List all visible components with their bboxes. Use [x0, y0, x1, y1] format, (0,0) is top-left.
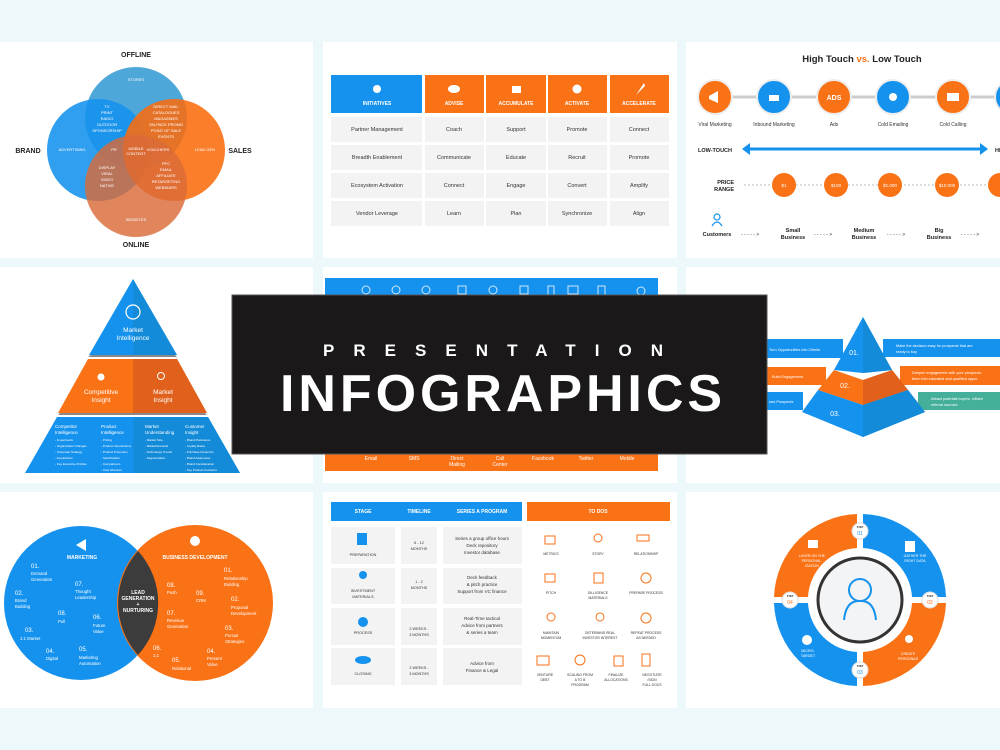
panel: marketing vs business development venn: Revenue: [167, 618, 185, 623]
panel: persona cycle: [686, 492, 1000, 708]
panel: channels table: SMS: [409, 456, 420, 462]
panel: market intelligence pyramid: - Brand Preference: [185, 438, 211, 442]
panel: high touch vs low touch: Big: [935, 228, 943, 234]
panel: venn marketing channels: RADIO: [101, 116, 113, 121]
panel: market intelligence pyramid: - Acquisitions: [55, 456, 73, 460]
panel: high touch vs low touch: Cold Calling: [940, 122, 967, 128]
panel: market intelligence pyramid: [0, 267, 313, 483]
panel: series A program table: 2 WEEKS -: [409, 627, 429, 631]
panel: high touch vs low touch: LOW-TOUCH: [698, 148, 732, 154]
panel: initiatives table: [323, 42, 677, 258]
panel: marketing vs business development venn: LEAD: [131, 590, 145, 596]
panel: marketing vs business development venn: Digital: [46, 656, 58, 661]
panel: channels table: Call: [496, 456, 504, 462]
panel: market intelligence pyramid: Product: [101, 424, 117, 429]
panel: marketing vs business development venn: Building: [15, 604, 31, 609]
panel: series A program table: Series a group office hours: [455, 536, 510, 541]
panel: marketing vs business development venn: Generation: [31, 577, 53, 582]
panel: initiatives table: ADVISE: [445, 101, 464, 107]
panel: marketing vs business development venn: 07.: [75, 582, 84, 588]
panel: sales pyramid: them into educated and qualified oppor: [912, 377, 978, 381]
panel: persona cycle: STEP: [857, 665, 864, 668]
panel: marketing vs business development venn: 04.: [46, 649, 55, 655]
panel: high touch vs low touch: - - - - - >: [961, 232, 979, 238]
panel: venn marketing channels: WEBINARS: [155, 185, 177, 190]
panel: market intelligence pyramid: Market: [145, 424, 160, 429]
panel: series A program table: STORY: [592, 552, 605, 556]
panel: series A program table: MATERIALS: [352, 595, 374, 599]
panel: series A program table: MATERIALS: [589, 596, 608, 600]
panel: initiatives table: Connect: [444, 183, 465, 189]
panel: market intelligence pyramid: Intelligence: [117, 335, 150, 342]
panel: series A program table: DETERMIND REAL: [585, 631, 615, 635]
panel: series A program table: AS NEEDED: [636, 636, 656, 640]
panel: marketing vs business development venn: NURTURING: [123, 608, 153, 614]
panel: marketing vs business development venn: GENERATION: [122, 596, 155, 602]
panel: series A program table: FULL DOCS: [643, 683, 662, 687]
panel: initiatives table: Promote: [629, 155, 649, 161]
panel: venn marketing channels: VIRAL: [101, 171, 114, 176]
panel: venn marketing channels: OFFLINE: [121, 52, 151, 59]
panel: market intelligence pyramid: Insight: [185, 430, 199, 435]
panel: high touch vs low touch: ADS: [827, 95, 842, 102]
panel: series A program table: STAGE: [355, 509, 372, 515]
panel: series A program table: TIMELINE: [407, 509, 431, 515]
panel: series A program table: 1 - 2: [415, 580, 423, 584]
panel: persona cycle: STEP: [927, 595, 934, 598]
panel: initiatives table: Breadth Enablement: [352, 155, 403, 161]
panel: market intelligence pyramid: - Organization Changes: [55, 444, 87, 448]
panel: series A program table: SERIES A PROGRAM: [457, 509, 507, 515]
panel: market intelligence pyramid: - Product Promotion: [101, 450, 128, 454]
panel: series A program table: RELATIONSHIP: [634, 552, 659, 556]
panel: venn marketing channels: SALES: [228, 148, 252, 155]
panel: initiatives table: Support: [506, 127, 526, 133]
panel: high touch vs low touch: $1,000: [883, 183, 897, 188]
panel: marketing vs business development venn: 08.: [167, 583, 176, 589]
panel: initiatives table: Convert: [567, 183, 587, 189]
panel: initiatives table: Vendor Leverage: [356, 211, 398, 217]
panel: venn marketing channels: PR: [111, 147, 117, 152]
panel: market intelligence pyramid: - Cost Structure: [101, 468, 122, 472]
panel: venn marketing channels: CATALOGUES: [153, 110, 180, 115]
panel: marketing vs business development venn: Value: [207, 662, 218, 667]
panel: venn marketing channels: MAGAZINES: [154, 116, 178, 121]
panel: venn marketing channels: DIRECT MAIL: [153, 104, 179, 109]
panel: marketing vs business development venn: Pull: [58, 619, 65, 624]
panel: marketing vs business development venn: 01.: [31, 564, 40, 570]
panel: high touch vs low touch: Cold Emailing: [878, 122, 909, 128]
panel: market intelligence pyramid: Understanding: [145, 430, 175, 435]
panel: series A program table: NEGOTIATE: [642, 673, 662, 677]
panel: venn marketing channels: EMAIL: [160, 167, 173, 172]
panel: sales pyramid: 02.: [840, 383, 850, 390]
panel: market intelligence pyramid: Market: [123, 327, 143, 334]
panel: series A program table: PREPARATION: [350, 553, 377, 557]
panel: series A program table: MONTHS: [411, 547, 428, 551]
panel: marketing vs business development venn: Building: [224, 582, 240, 587]
panel: market intelligence pyramid: - Brand Awareness: [185, 456, 211, 460]
panel: marketing vs business development venn: CRM: [196, 598, 206, 603]
panel: series A program table: & pitch practice: [467, 582, 498, 587]
panel: series A program table: 6 - 12: [414, 541, 424, 545]
panel: marketing vs business development venn: 1:1 Market: [20, 636, 41, 641]
panel: series A program table: METRICS: [543, 552, 559, 556]
panel: market intelligence pyramid: - Key Executive Profiles: [55, 462, 87, 466]
panel: series A program table: 3 MONTHS: [409, 633, 429, 637]
panel: high touch vs low touch: Business: [927, 235, 951, 241]
panel: venn marketing channels: ON-PACK PROMO: [149, 122, 183, 127]
panel: marketing vs business development venn: 02.: [231, 597, 240, 603]
panel: sales pyramid: Turn Opportunities into Clients: [769, 348, 820, 352]
panel: market intelligence pyramid: - Comparisons: [101, 462, 121, 466]
panel: series A program table: PREPARE PROCESS: [629, 591, 663, 595]
panel: venn marketing channels: STORES: [128, 77, 145, 82]
panel: marketing vs business development venn: 05.: [172, 658, 181, 664]
panel: series A program table: PROCESS: [354, 631, 373, 635]
panel: series A program table: DILLIGENCE: [588, 591, 609, 595]
panel: marketing vs business development venn: 08.: [58, 611, 67, 617]
panel: series A program table: DEBT: [540, 678, 550, 682]
panel: initiatives table: Align: [633, 211, 645, 217]
panel: series A program table: SCALING FROM: [567, 673, 593, 677]
panel: marketing vs business development venn: Generation: [167, 624, 189, 629]
panel: series A program table: Deck repository: [466, 543, 498, 548]
panel: high touch vs low touch: Business: [781, 235, 805, 241]
panel: market intelligence pyramid: - Technology Trends: [145, 450, 172, 454]
panel: persona cycle: CREATE: [901, 652, 916, 656]
panel: venn marketing channels: DISPLAY: [99, 165, 116, 170]
panel: marketing vs business development venn: Future: [93, 623, 106, 628]
panel: marketing vs business development venn: 07.: [167, 611, 176, 617]
panel: marketing vs business development venn: Marketing: [79, 655, 98, 660]
panel: venn marketing channels: NATIVE: [100, 183, 114, 188]
panel: initiatives table: Connect: [629, 127, 650, 133]
panel: marketing vs business development venn: Strategies: [225, 639, 244, 644]
panel: venn marketing channels: PRINT: [101, 110, 114, 115]
panel: market intelligence pyramid: - Corporate Strategy: [55, 450, 83, 454]
panel: series A program table: MOMENTUM: [541, 636, 561, 640]
panel: marketing vs business development venn: Proposal: [231, 605, 248, 610]
panel: high touch vs low touch: $10,000: [939, 183, 956, 188]
panel: market intelligence pyramid: - Segmentation: [145, 456, 166, 460]
panel: series A program table: MONTHS: [411, 586, 428, 590]
panel: marketing vs business development venn: Brand: [15, 598, 27, 603]
panel: persona cycle: STEP: [787, 595, 794, 598]
panel: marketing vs business development venn: Push: [167, 590, 177, 595]
panel: venn marketing channels: AFFILIATE: [156, 173, 176, 178]
panel: channels table: Mailing: [449, 462, 465, 468]
panel: sales pyramid: ready to buy: [896, 350, 917, 354]
panel: venn marketing channels: ADVERTISING: [58, 147, 86, 152]
panel: marketing vs business development venn: 03.: [225, 626, 234, 632]
panel: marketing vs business development venn: [0, 492, 313, 708]
panel: high touch vs low touch: Small: [786, 228, 801, 234]
panel: sales pyramid: Make the decision easy for prospects that are: [896, 344, 973, 348]
panel: series A program table: Support from VC finance: [457, 589, 507, 594]
panel: market intelligence pyramid: - Brand Consideration: [185, 462, 215, 466]
panel: marketing vs business development venn: MARKETING: [67, 555, 97, 561]
title: presentation: PRESENTATION: [323, 341, 663, 360]
panel: series A program table: Deck feedback: [467, 575, 498, 580]
panel: venn marketing channels: PPC: [162, 161, 170, 166]
panel: marketing vs business development venn: 01.: [224, 568, 233, 574]
panel: venn marketing channels: MOBILE: [128, 146, 144, 151]
panel: persona cycle: RIGHT DATA: [904, 559, 926, 563]
panel: sales pyramid: 01.: [849, 350, 859, 357]
panel: venn marketing channels: [0, 42, 313, 258]
panel: series A program table: REPEAT PROCESS: [631, 631, 662, 635]
panel: series A program table: Investor database: [464, 550, 500, 555]
panel: venn marketing channels: EVENTS: [158, 134, 174, 139]
panel: channels table: [323, 267, 677, 483]
panel: initiatives table: Educate: [506, 155, 526, 161]
panel: persona cycle: TARGET: [801, 654, 816, 658]
panel: market intelligence pyramid: - Specification: [101, 456, 120, 460]
panel: series A program table: [323, 492, 677, 708]
panel: market intelligence pyramid: - Marketforecasts: [145, 444, 169, 448]
panel: sales pyramid: Build Engagement: [772, 375, 804, 379]
panel: marketing vs business development venn: Demand: [31, 571, 48, 576]
panel: sales pyramid: referral sources: [931, 403, 957, 407]
panel: series A program table: INVESTMENT: [351, 589, 376, 593]
panel: sales pyramid: ract Prospects: [769, 400, 793, 404]
panel: marketing vs business development venn: 04.: [207, 649, 216, 655]
panel: marketing vs business development venn: 06.: [153, 646, 162, 652]
panel: market intelligence pyramid: - Pricing: [101, 438, 112, 442]
panel: marketing vs business development venn: Automation: [79, 661, 101, 666]
panel: high touch vs low touch: $1: [781, 183, 787, 188]
panel: persona cycle: STEP: [857, 526, 864, 529]
panel: marketing vs business development venn: Relational: [172, 666, 191, 671]
panel: marketing vs business development venn: 09.: [196, 591, 205, 597]
title: infographics: INFOGRAPHICS: [280, 365, 722, 423]
panel: market intelligence pyramid: Competitor: [55, 424, 78, 429]
panel: venn marketing channels: CONTENT: [126, 151, 146, 156]
panel: initiatives table: INITIATIVES: [363, 101, 392, 107]
panel: initiatives table: Recruit: [568, 155, 586, 161]
panel: series A program table: INVESTOR INTEREST: [583, 636, 617, 640]
panel: series A program table: Advice from: [470, 661, 494, 666]
panel: venn marketing channels: OUTDOOR: [97, 122, 117, 127]
panel: persona cycle: 04: [787, 600, 793, 606]
panel: marketing vs business development venn: 1:1: [153, 653, 160, 658]
panel: persona cycle: 03: [857, 670, 863, 676]
panel: persona cycle: LAYER ON THE: [799, 554, 826, 558]
panel: market intelligence pyramid: - Key Product Concerns: [185, 468, 217, 472]
panel: marketing vs business development venn: BUSINESS DEVELOPMENT: [162, 555, 228, 561]
panel: marketing vs business development venn: 06.: [93, 615, 102, 621]
panel: sales pyramid: Deepen engagement with your prospects: [912, 371, 981, 375]
panel: marketing vs business development venn: 03.: [25, 628, 34, 634]
panel: series A program table: Advice from partners: [461, 623, 504, 628]
panel: channels table: Email: [365, 456, 377, 462]
panel: venn marketing channels: BRAND: [15, 148, 41, 155]
panel: market intelligence pyramid: Market: [153, 389, 173, 396]
panel: market intelligence pyramid: Intelligence: [55, 430, 78, 435]
panel: market intelligence pyramid: Customer: [185, 424, 205, 429]
panel: initiatives table: ACTIVATE: [565, 101, 590, 107]
panel: channels table: Mobile: [620, 456, 635, 462]
panel: market intelligence pyramid: Intelligence: [101, 430, 124, 435]
panel: venn marketing channels: LEAD GEN: [195, 147, 215, 152]
panel: venn marketing channels: SPONSORSHIP: [92, 128, 122, 133]
panel: high touch vs low touch: Business: [852, 235, 876, 241]
panel: series A program table: FINALIZE: [609, 673, 624, 677]
panel: initiatives table: Plan: [510, 211, 522, 217]
panel: market intelligence pyramid: - Product Introductions: [101, 444, 132, 448]
panel: series A program table: MAINTAIN: [543, 631, 560, 635]
panel: high touch vs low touch: Ads: [830, 122, 839, 128]
panel: persona cycle: 02: [927, 600, 933, 606]
panel: high touch vs low touch: Medium: [854, 228, 874, 234]
panel: marketing vs business development venn: Value: [93, 629, 104, 634]
panel: market intelligence pyramid: - Investments: [55, 438, 74, 442]
panel: initiatives table: Communicate: [437, 155, 471, 161]
panel: sales pyramid: [686, 267, 1000, 483]
panel: initiatives table: Engage: [507, 183, 525, 189]
panel: series A program table: Real-Time tactical: [464, 616, 500, 621]
panel: market intelligence pyramid: - Market Size: [145, 438, 163, 442]
panel: initiatives table: Amplify: [630, 183, 648, 189]
panel: high touch vs low touch: RANGE: [714, 187, 734, 193]
panel: channels table: Center: [492, 462, 508, 468]
panel: persona cycle: GATHER THE: [904, 554, 927, 558]
title banner: [232, 295, 767, 454]
panel: marketing vs business development venn: 02.: [15, 591, 24, 597]
panel: persona cycle: IZATION: [805, 564, 819, 568]
panel: initiatives table: Synchronize: [562, 211, 592, 217]
panel: high touch vs low touch: Customers: [703, 232, 731, 238]
panel: series A program table: ALLOCATIONS: [604, 678, 628, 682]
panel: initiatives table: Ecosystem Activation: [351, 183, 403, 189]
panel: series A program table: A TO B: [575, 678, 586, 682]
panel: series A program table: & series a team: [466, 630, 498, 635]
panel: high touch vs low touch: - - - - - >: [887, 232, 905, 238]
panel: marketing vs business development venn: Pursuit: [225, 633, 239, 638]
panel: series A program table: /SIGN: [647, 678, 657, 682]
panel: channels table: Direct: [450, 456, 464, 462]
panel: marketing vs business development venn: Thought: [75, 589, 92, 594]
panel: marketing vs business development venn: +: [137, 602, 140, 608]
panel: sales pyramid: 03.: [830, 411, 840, 418]
panel: marketing vs business development venn: Present: [207, 656, 223, 661]
panel: marketing vs business development venn: 05.: [79, 647, 88, 653]
panel: series A program table: VENTURE: [537, 673, 554, 677]
panel: series A program table: Finance & Legal: [466, 668, 498, 673]
panel: venn marketing channels: POINT OF SALE: [151, 128, 181, 133]
panel: persona cycle: 01: [857, 531, 863, 537]
panel: high touch vs low touch: PRICE: [717, 180, 734, 186]
panel: market intelligence pyramid: Insight: [153, 397, 173, 404]
panel: venn marketing channels: TV: [104, 104, 110, 109]
panel: venn marketing channels: VOUCHERS: [147, 147, 170, 152]
panel: market intelligence pyramid: Competitive: [84, 389, 119, 396]
panel: high touch vs low touch: $100: [831, 183, 842, 188]
panel: series A program table: TO DOS: [588, 509, 608, 515]
panel: initiatives table: Partner Management: [351, 127, 403, 133]
panel: initiatives table: Coach: [446, 127, 462, 133]
panel: sales pyramid: Attract potential buyers, influen: [931, 397, 983, 401]
panel: initiatives table: Promote: [567, 127, 587, 133]
panel: marketing vs business development venn: Leadership: [75, 595, 97, 600]
panel: venn marketing channels: WEBSITES: [126, 217, 147, 222]
panel: high touch vs low touch: - - - - - >: [814, 232, 832, 238]
panel: persona cycle: MICRO-: [801, 649, 815, 653]
panel: channels table: Twitter: [579, 456, 594, 462]
panel: series A program table: CLOSING: [354, 672, 372, 676]
panel: marketing vs business development venn: Development: [231, 611, 257, 616]
panel: market intelligence pyramid: Insight: [91, 397, 111, 404]
panel: initiatives table: ACCUMULATE: [499, 101, 534, 107]
panel: marketing vs business development venn: Relationship: [224, 576, 248, 581]
panel: initiatives table: ACCELERATE: [622, 101, 657, 107]
panel: series A program table: 2 WEEKS -: [409, 666, 429, 670]
panel: channels table: Facebook: [532, 456, 554, 462]
panel: high touch vs low touch: High Touch vs. Low Touch: [802, 54, 922, 65]
panel: venn marketing channels: RETARGETING: [152, 179, 180, 184]
panel: persona cycle: PERSONAL-: [802, 559, 823, 563]
panel: high touch vs low touch: Viral Marketing: [698, 122, 732, 128]
panel: market intelligence pyramid: - Loyalty Rates: [185, 444, 206, 448]
panel: persona cycle: PERSONAS: [898, 657, 919, 661]
panel: high touch vs low touch: - - - - - >: [741, 232, 759, 238]
panel: series A program table: 3 MONTHS: [409, 672, 429, 676]
panel: high touch vs low touch: [686, 42, 1000, 258]
panel: initiatives table: Learn: [447, 211, 461, 217]
panel: high touch vs low touch: Inbound Marketing: [753, 122, 795, 128]
panel: venn marketing channels: ONLINE: [123, 242, 150, 249]
panel: series A program table: PITCH: [546, 591, 557, 595]
panel: market intelligence pyramid: - Purchase Dynamics: [185, 450, 214, 454]
panel: venn marketing channels: VIDEO: [101, 177, 113, 182]
panel: series A program table: PROGRAM: [571, 683, 589, 687]
